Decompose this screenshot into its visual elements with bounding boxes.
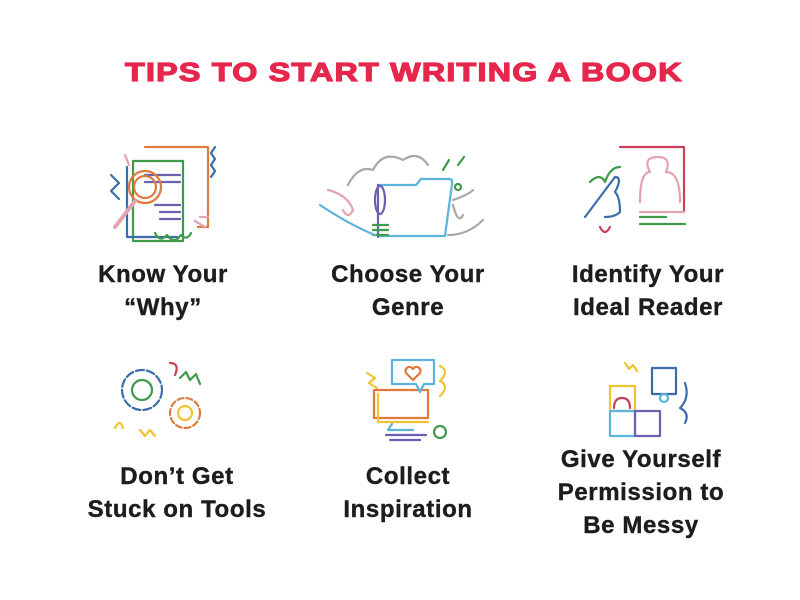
label: identify your ideal reader: Ideal Reader	[573, 294, 723, 321]
label: give yourself permission to be messy: Give Yourself	[561, 446, 721, 473]
label: know your why: “Why”	[124, 294, 202, 321]
label: collect inspiration	[343, 463, 473, 523]
label: collect inspiration: Collect	[366, 463, 450, 490]
label: give yourself permission to be messy: Be Messy	[583, 512, 699, 539]
icon: documents with magnifier	[110, 146, 216, 242]
label: don't get stuck on tools: Stuck on Tools	[88, 496, 266, 523]
label: choose your genre: Genre	[372, 294, 444, 321]
label: give yourself permission to be messy: Permission to	[558, 479, 724, 506]
icon: computer with heart	[366, 358, 448, 442]
icon: gears	[114, 362, 202, 438]
label: give yourself permission to be messy	[558, 446, 724, 539]
label: choose your genre	[331, 261, 485, 321]
label: know your why: Know Your	[98, 261, 228, 288]
icon: puzzle	[608, 362, 688, 438]
label: don't get stuck on tools	[88, 463, 266, 523]
label: identify your ideal reader	[572, 261, 724, 321]
label: don't get stuck on tools: Don’t Get	[120, 463, 234, 490]
icon: folder	[318, 154, 484, 238]
label: identify your ideal reader: Identify Your	[572, 261, 724, 288]
label: know your why	[98, 261, 228, 321]
icon: ideal reader	[584, 146, 686, 234]
title: TIPS TO START WRITING A BOOK	[125, 57, 683, 87]
label: collect inspiration: Inspiration	[343, 496, 473, 523]
label: choose your genre: Choose Your	[331, 261, 485, 288]
